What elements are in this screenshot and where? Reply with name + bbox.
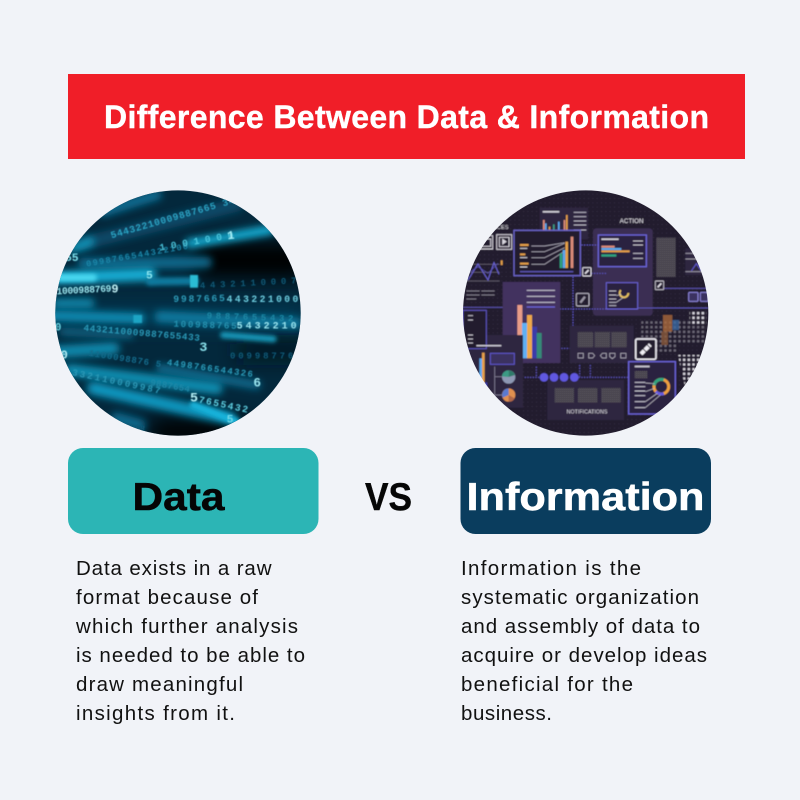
digits (55, 195, 299, 435)
digits: 4432110009887655433 (83, 323, 201, 344)
purple social circles (540, 373, 579, 382)
text block: data description: Data exists in a raw (76, 557, 272, 580)
digits: 54432210009887665 34 (109, 195, 236, 241)
label text: Data: Data (132, 476, 225, 519)
label box: Data (68, 448, 318, 534)
connector dotted lines (525, 245, 629, 377)
blurred streaks (50, 195, 297, 425)
digits: 0998766544322100 (85, 242, 189, 270)
label text: Information: Information (466, 476, 704, 519)
digits: 0 (55, 322, 61, 334)
digits: 9887655432 (207, 311, 294, 324)
digits: 0000998 (110, 420, 146, 435)
illustration: information dashboard circle (458, 185, 714, 441)
text block: data description (75, 557, 305, 725)
top mini chart panel (540, 208, 588, 239)
digits: 1100098876 5 (88, 349, 162, 370)
text block: information description: acquire or develop ideas (461, 644, 707, 667)
digits: 100988765 (173, 319, 237, 332)
big link icon (636, 339, 656, 359)
digits: 00998776 (230, 351, 293, 361)
digits: 332110009987 (71, 367, 161, 397)
digits: 6 (253, 376, 261, 391)
notifications label: NOTIFICATIONS (567, 409, 608, 415)
line chart top left (466, 260, 503, 299)
digits: 5432210 (237, 320, 297, 331)
text block: data description: draw meaningful (76, 673, 243, 696)
text block: data description: format because of (76, 586, 258, 609)
text block: information description: business. (461, 702, 552, 725)
digits: 9 (111, 282, 119, 296)
text block: information description: systematic organization (461, 586, 699, 609)
center bar chart panel (503, 282, 560, 363)
video icons (478, 235, 512, 249)
digits: 7655432 (198, 395, 249, 416)
top left framed chart (514, 230, 580, 276)
bottom right donut panel (629, 362, 675, 414)
digits: 5 (146, 270, 153, 282)
digits: 55 (65, 253, 79, 265)
digits: 9887654 (149, 378, 191, 395)
text block: data description: which further analysis (75, 615, 298, 638)
text block: data description: insights from it. (76, 702, 235, 725)
photo: blue data digits circle (55, 190, 301, 436)
text block: information description: Information is the (461, 557, 641, 580)
title text: Difference Between Data & Information (104, 99, 709, 135)
text block: information description: and assembly of data to (461, 615, 700, 638)
digits: 1 (227, 229, 235, 243)
action label: ACTION (620, 218, 644, 225)
dotted world map (641, 312, 706, 385)
text block: information description (461, 557, 707, 725)
link icons (576, 268, 664, 306)
solid connectors (463, 288, 708, 308)
digits: 1001000 (159, 230, 235, 254)
right small panel (685, 248, 709, 301)
text block: data description: is needed to be able to (76, 644, 305, 667)
digits: 5 (190, 392, 198, 407)
digits: 5 (227, 414, 234, 426)
text block: information description: beneficial for the (461, 673, 633, 696)
VS label: VS (365, 476, 412, 519)
left lower panel with pies (463, 310, 523, 408)
digits: 1000988769 (56, 283, 112, 297)
services label: ICES (495, 225, 509, 231)
gray text blocks (547, 238, 676, 420)
digits: 3 (199, 341, 207, 356)
title banner (68, 74, 745, 159)
digits: 9987665 (173, 293, 225, 305)
digits: 443221000 (227, 294, 299, 305)
right action panel (593, 218, 653, 316)
digits: 4432110007 (200, 276, 297, 291)
digits: 0 (61, 348, 68, 362)
label box: Information (460, 448, 711, 534)
digits: 4498766544326 (166, 358, 253, 380)
